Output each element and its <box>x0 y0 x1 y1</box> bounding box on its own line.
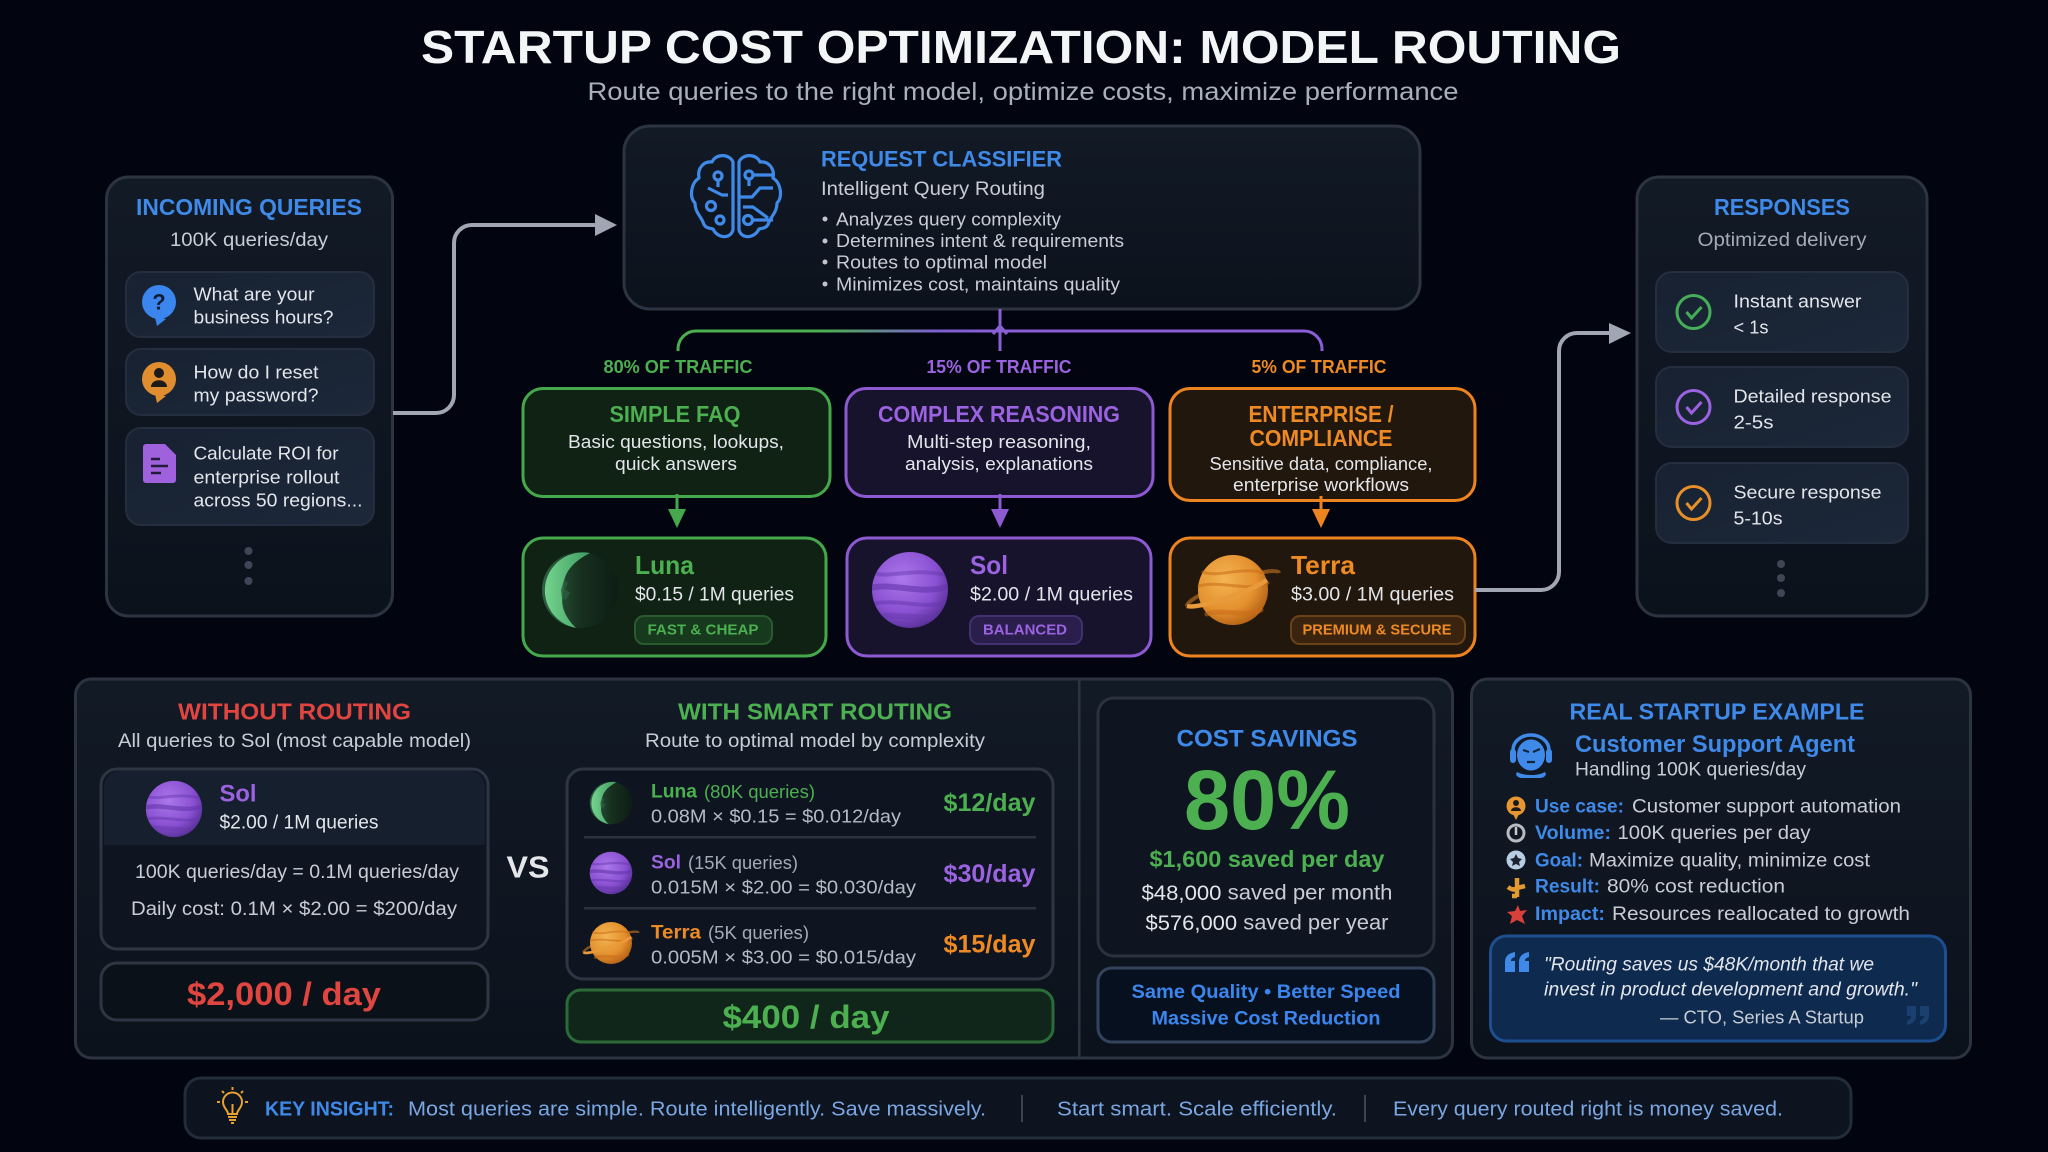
query card: ROI <box>126 428 374 525</box>
card: complex reasoning: Multi-step reasoning, <box>907 432 1091 452</box>
row: Sol: Sol <box>651 852 681 874</box>
panel: request classifier <box>624 126 1420 309</box>
row: Luna: $12/day <box>944 789 1036 817</box>
card: complex reasoning: COMPLEX REASONING <box>878 401 1120 427</box>
arrow: FAQ to Luna <box>668 494 686 528</box>
row: Terra: 0.005M × $3.00 = $0.015/day <box>651 946 917 968</box>
response card: detailed: 2-5s <box>1734 412 1774 432</box>
query card: password <box>126 349 374 415</box>
model card: Luna: Luna <box>635 550 695 580</box>
list: impact <box>1507 904 1910 925</box>
box: cost savings: $48,000 saved per month <box>1142 882 1392 904</box>
model card: Terra: $3.00 / 1M queries <box>1291 584 1454 606</box>
query card: business hours: ? <box>152 290 166 314</box>
list: result: Result: <box>1535 876 1600 898</box>
response card: secure <box>1656 463 1908 543</box>
row: Luna: 0.08M × $0.15 = $0.012/day <box>651 806 902 826</box>
response card: secure: Secure response <box>1734 482 1882 502</box>
list: volume <box>1508 823 1811 844</box>
query card: ROI: enterprise rollout <box>194 466 340 488</box>
connector: classifier to categories <box>678 309 1322 351</box>
card: simple FAQ <box>523 388 830 496</box>
card: enterprise compliance: enterprise workflows <box>1233 475 1409 495</box>
row: Terra: Terra <box>651 922 701 944</box>
text: volume: 100K queries/day <box>170 229 328 251</box>
subtitle: Route queries to the right model, optimize costs, maximize performance <box>588 78 1458 106</box>
heading: incoming queries: INCOMING QUERIES <box>136 194 362 220</box>
query card: business hours: business hours? <box>194 306 334 328</box>
card: simple FAQ: SIMPLE FAQ <box>610 401 740 427</box>
callout: same quality <box>1098 968 1434 1042</box>
response card: secure: 5-10s <box>1734 508 1782 528</box>
traffic label: 5%: 5% OF TRAFFIC <box>1252 357 1386 377</box>
footer: key insight bar: Every query routed right is money saved. <box>1393 1098 1783 1120</box>
title: STARTUP COST OPTIMIZATION: MODEL ROUTING <box>421 21 1621 73</box>
list: classifier features <box>822 208 1124 294</box>
tag: balanced: BALANCED <box>983 622 1067 638</box>
card: complex reasoning <box>846 388 1153 496</box>
heading: classifier: REQUEST CLASSIFIER <box>821 146 1062 172</box>
card: simple FAQ: Basic questions, lookups, <box>568 432 784 452</box>
card: enterprise compliance <box>1170 388 1475 500</box>
text: without routing sub: All queries to Sol (most capable model) <box>118 731 471 752</box>
row: Terra: $15/day <box>944 930 1036 958</box>
text: subtitle: Intelligent Query Routing <box>821 178 1045 200</box>
box: Sol only cost: Daily cost: 0.1M × $2.00 = $200/day <box>131 899 458 920</box>
total: with routing <box>567 990 1053 1042</box>
callout: CTO quote <box>1490 936 1946 1041</box>
box: cost savings: COST SAVINGS <box>1176 726 1358 752</box>
callout: same quality: Same Quality • Better Speed <box>1132 981 1400 1003</box>
response card: instant <box>1656 272 1908 352</box>
total: with routing: $400 / day <box>722 999 890 1035</box>
icon: Sol planet <box>144 781 204 837</box>
row: Sol: $30/day <box>944 860 1036 888</box>
heading: customer support agent: Customer Support Agent <box>1575 731 1855 758</box>
icon: Luna planet <box>542 552 618 628</box>
traffic label: 15%: 15% OF TRAFFIC <box>926 357 1072 377</box>
list: classifier features: Minimizes cost, maintains quality <box>836 274 1121 294</box>
list: classifier features: Determines intent & requirements <box>836 230 1124 251</box>
text: handling volume: Handling 100K queries/day <box>1575 760 1806 780</box>
arrow: reasoning to Sol <box>991 494 1009 528</box>
row: Terra: (5K queries) <box>708 923 809 943</box>
query card: password: How do I reset <box>194 362 318 382</box>
VS label: VS <box>506 850 550 884</box>
arrow: compliance to Terra <box>1312 496 1330 528</box>
card: simple FAQ: quick answers <box>615 454 737 474</box>
row: Sol: 0.015M × $2.00 = $0.030/day <box>651 876 917 898</box>
icon: opening quote <box>1505 952 1529 972</box>
box: cost savings: $576,000 saved per year <box>1146 912 1389 934</box>
box: Sol only cost <box>101 769 488 949</box>
callout: CTO quote: invest in product development and growth." <box>1544 980 1918 1000</box>
footer: key insight bar <box>185 1078 1851 1138</box>
list: volume: Volume: <box>1535 823 1611 844</box>
list: impact: Resources reallocated to growth <box>1612 904 1910 925</box>
panel: real startup example <box>1472 679 1970 1058</box>
list: use case <box>1506 796 1901 820</box>
box: cost savings: $1,600 saved per day <box>1150 846 1385 872</box>
tag: premium and secure: PREMIUM & SECURE <box>1302 622 1452 638</box>
box: cost savings: 80% <box>1184 753 1350 847</box>
heading: with smart routing: WITH SMART ROUTING <box>678 698 952 724</box>
list: result: 80% cost reduction <box>1607 876 1785 898</box>
panel: incoming queries <box>106 177 392 616</box>
response card: instant: < 1s <box>1734 316 1768 338</box>
tag: fast and cheap <box>635 616 772 644</box>
tag: premium and secure <box>1291 616 1465 644</box>
model card: Luna <box>523 538 826 656</box>
list: use case: Use case: <box>1535 796 1624 818</box>
model card: Terra <box>1170 538 1475 656</box>
text: smart routing sub: Route to optimal model by complexity <box>645 731 986 752</box>
box: Sol only cost: Sol <box>220 780 256 808</box>
row: Terra <box>583 922 1036 968</box>
icon: light bulb <box>217 1087 248 1123</box>
box: routed breakdown <box>567 769 1053 979</box>
heading: real startup example: REAL STARTUP EXAMPLE <box>1570 698 1864 724</box>
row: Sol <box>589 852 1036 898</box>
panel: responses <box>1637 177 1927 616</box>
list: goal: Goal: <box>1535 850 1583 872</box>
heading: responses: RESPONSES <box>1714 194 1850 220</box>
response card: instant: Instant answer <box>1734 290 1862 312</box>
icon: Sol planet <box>870 552 950 628</box>
text: optimized delivery: Optimized delivery <box>1698 229 1867 251</box>
arrow: Terra to responses <box>1475 323 1631 590</box>
row: Luna: Luna <box>651 782 697 802</box>
model card: Sol: Sol <box>970 550 1008 580</box>
response card: detailed: Detailed response <box>1734 386 1892 406</box>
response card: detailed <box>1656 367 1908 447</box>
model card: Terra: Terra <box>1291 550 1356 580</box>
list: goal: Maximize quality, minimize cost <box>1589 850 1871 872</box>
query card: business hours <box>126 272 374 337</box>
card: complex reasoning: analysis, explanations <box>905 454 1093 474</box>
list: use case: Customer support automation <box>1632 796 1901 818</box>
icon: brain <box>692 156 780 237</box>
box: Sol only cost: $2.00 / 1M queries <box>220 812 378 834</box>
list: result <box>1508 876 1785 898</box>
row: Sol: (15K queries) <box>688 853 798 873</box>
total: without routing <box>101 963 488 1020</box>
callout: same quality: Massive Cost Reduction <box>1152 1008 1380 1030</box>
tag: fast and cheap: FAST & CHEAP <box>648 622 758 638</box>
icon: Terra planet <box>1187 555 1279 625</box>
query card: ROI: across 50 regions... <box>194 490 362 510</box>
model card: Luna: $0.15 / 1M queries <box>635 584 794 606</box>
arrow: queries to classifier <box>393 214 617 413</box>
callout: CTO quote: — CTO, Series A Startup <box>1660 1006 1864 1028</box>
traffic label: 80%: 80% OF TRAFFIC <box>604 357 752 377</box>
callout: CTO quote: "Routing saves us $48K/month that we <box>1544 954 1874 976</box>
panel: routing comparison <box>76 679 1452 1058</box>
list: volume: 100K queries per day <box>1618 823 1811 844</box>
icon: closing quote <box>1907 1006 1929 1025</box>
card: enterprise compliance: COMPLIANCE <box>1250 425 1392 451</box>
row: Luna: (80K queries) <box>704 782 815 802</box>
card: enterprise compliance: Sensitive data, compliance, <box>1210 454 1432 474</box>
more dots <box>244 547 252 585</box>
row: Luna <box>590 782 1036 826</box>
box: cost savings <box>1098 698 1434 956</box>
heading: without routing: WITHOUT ROUTING <box>178 698 411 724</box>
tag: balanced <box>970 616 1082 644</box>
query card: password: my password? <box>194 384 318 406</box>
list: impact: Impact: <box>1535 904 1605 925</box>
card: enterprise compliance: ENTERPRISE / <box>1248 401 1394 427</box>
footer: key insight bar: KEY INSIGHT: <box>265 1098 394 1120</box>
list: classifier features: Routes to optimal model <box>836 252 1047 272</box>
model card: Sol: $2.00 / 1M queries <box>970 584 1133 606</box>
more dots <box>1777 560 1785 597</box>
query card: business hours: What are your <box>194 284 314 304</box>
total: without routing: $2,000 / day <box>187 976 381 1012</box>
footer: key insight bar: Start smart. Scale efficiently. <box>1057 1098 1337 1120</box>
query card: ROI: Calculate ROI for <box>194 442 338 464</box>
model card: Sol <box>847 538 1151 656</box>
icon: support agent <box>1510 735 1552 778</box>
list: classifier features: Analyzes query complexity <box>836 208 1062 230</box>
footer: key insight bar: Most queries are simple. Route intelligently. Save massively. <box>408 1098 986 1120</box>
box: Sol only cost: 100K queries/day = 0.1M queries/day <box>135 862 460 883</box>
